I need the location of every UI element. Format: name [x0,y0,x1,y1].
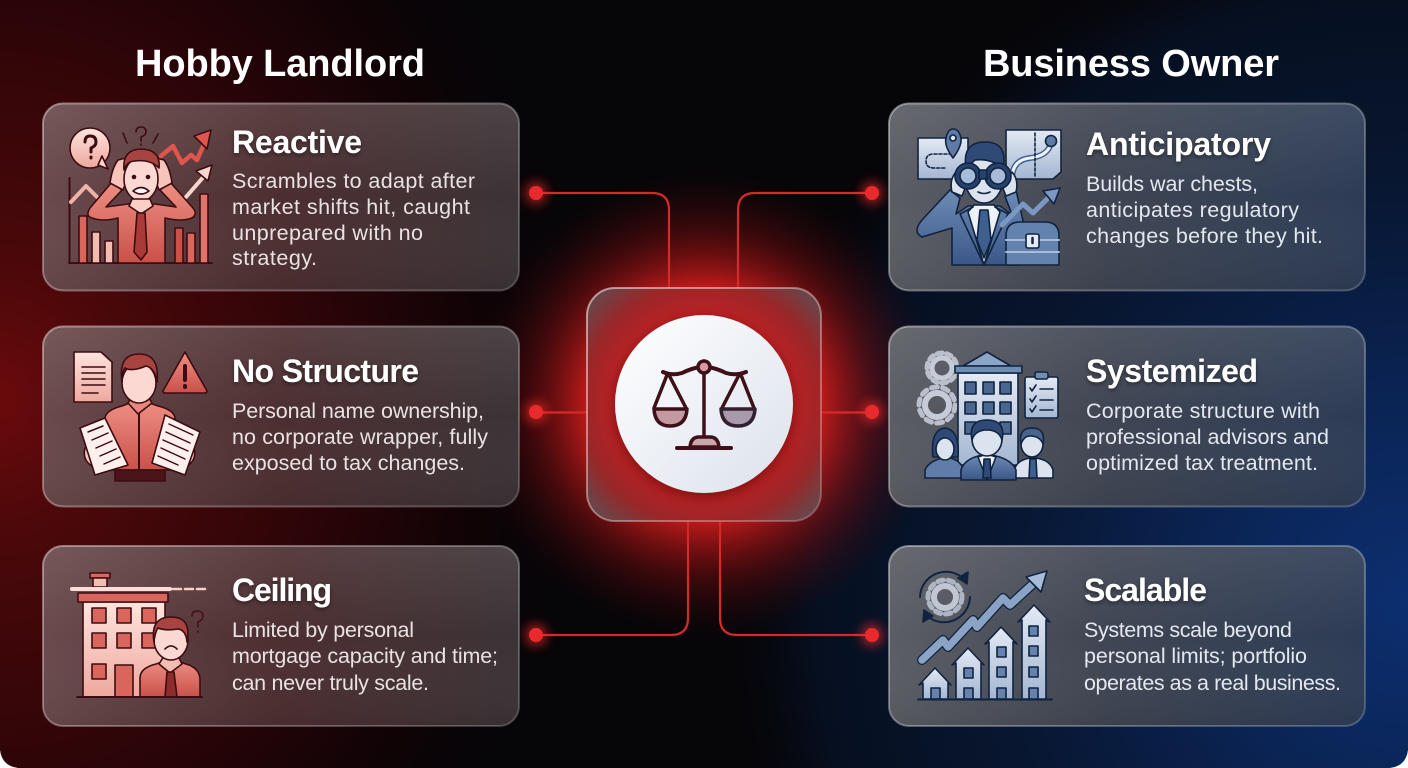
description: exposed to tax changes. [232,451,465,475]
panel: Scalable [889,546,1365,726]
description: strategy. [232,246,317,270]
title: Ceiling [232,572,332,608]
icon: person with binoculars, maps and chest [917,129,1061,265]
description: mortgage capacity and time; [232,644,498,668]
description: market shifts hit, caught [232,195,470,219]
icon: balance scales [654,361,755,448]
description: changes before they hit. [1086,224,1323,248]
connectors [536,193,872,635]
description: Personal name ownership, [232,399,484,423]
connector node dots [526,183,882,645]
description [1086,172,1323,248]
description: can never truly scale. [232,671,429,695]
panel: No Structure [43,326,519,506]
icon: building with ceiling and person [72,573,208,697]
description: Systems scale beyond [1084,618,1292,642]
description: Builds war chests, [1086,172,1258,196]
panel: Anticipatory [889,104,1365,290]
panel: Reactive [43,104,519,290]
description: professional advisors and [1086,425,1329,449]
description: operates as a real business. [1084,671,1341,695]
icon: stressed person with charts [69,127,212,263]
icon: building, gears, team and checklist [919,352,1058,480]
description [1084,618,1341,695]
description [1086,399,1329,475]
description: personal limits; portfolio [1084,644,1307,668]
title: Systemized [1086,353,1258,389]
description [232,618,498,695]
icon: gear, rising arrow and houses [918,571,1052,700]
heading: Business Owner: Business Owner [983,43,1279,85]
central hub [587,288,821,521]
panel: Ceiling [43,546,519,726]
title: Scalable [1084,572,1207,608]
description: unprepared with no [232,221,423,245]
heading: Hobby Landlord: Hobby Landlord [135,43,425,85]
description: Scrambles to adapt after [232,169,475,193]
description: anticipates regulatory [1086,198,1299,222]
description: Limited by personal [232,618,414,642]
title: Anticipatory [1086,126,1271,162]
description [232,399,488,475]
description [232,169,475,270]
page corners [0,750,1408,768]
title: Reactive [232,124,362,160]
description: optimized tax treatment. [1086,451,1318,475]
title: No Structure [232,353,419,389]
description: no corporate wrapper, fully [232,425,488,449]
panel: Systemized [889,326,1365,506]
disc [615,315,793,493]
icon: person holding papers [74,352,207,481]
description: Corporate structure with [1086,399,1320,423]
